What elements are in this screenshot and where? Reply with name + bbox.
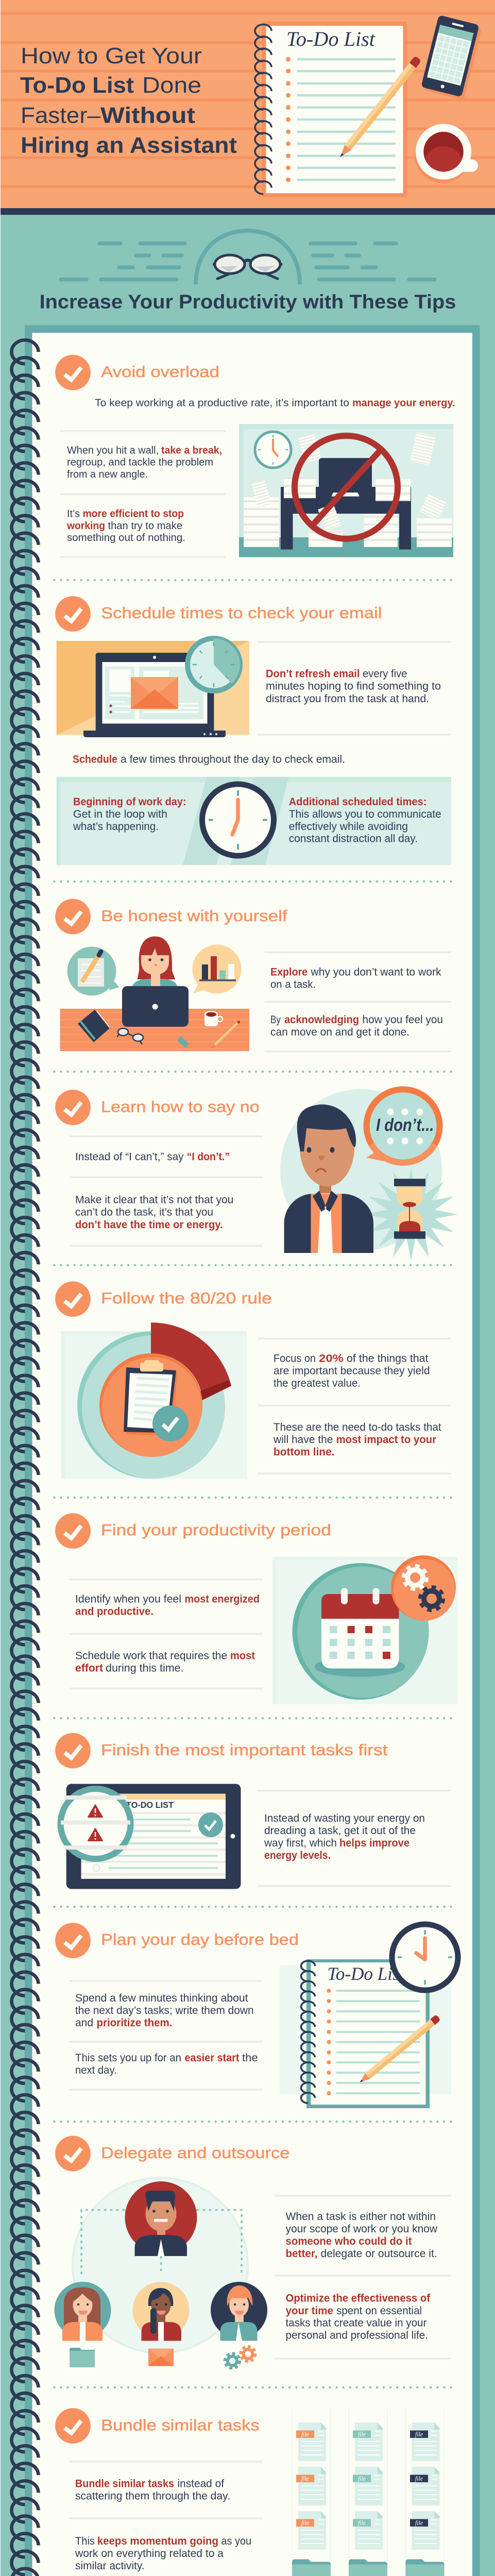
text: need to-do tasks [273,1421,441,1458]
icon: check [55,2136,91,2171]
text: acknowledging: By [270,1014,281,1026]
text: optimize: your time [285,2305,333,2317]
text: focus on 20% [274,1353,430,1389]
text: most energized: most energized [184,1594,260,1605]
heading: avoid overload: Avoid overload [101,363,219,381]
text: easier start: the [242,2052,258,2064]
icon: envelope [131,677,178,709]
text: need to-do tasks: bottom line. [274,1446,335,1458]
icon: prohibition sign [295,436,398,539]
text: easier start: easier start [184,2052,240,2064]
title: How to Get Your [21,43,202,69]
file labels: file [415,2430,423,2438]
text: don't refresh email: distract you from the task at hand. [266,693,429,705]
heading: increase your productivity: Increase Your Productivity with These Tips [40,292,456,313]
illustration: files and folders [292,2409,444,2576]
icon: check [55,899,91,934]
text: schedule: Schedule [73,754,117,766]
text: need to-do tasks: These are the need to-do tasks that [274,1421,441,1433]
icon: pencil [337,56,422,160]
illustration: tablet with magnifier: TO-DO LIST [126,1800,174,1810]
file labels: file [301,2430,309,2438]
text: beginning of work day [73,796,186,833]
icon: warning [88,1828,103,1841]
text: spend a few minutes: the next day’s tasks; write them down [75,2005,254,2016]
file labels: file [358,2519,366,2527]
text: make it clear: Make it clear that it’s not that you [75,1194,233,1206]
panel: scheduled times [57,777,451,865]
icon: check [55,1513,91,1549]
text: acknowledging: can move on and get it done. [270,1026,409,1038]
heading: schedule times: Schedule times to check your email [101,604,382,622]
text: spend a few minutes: and [75,2017,93,2029]
icon: envelope [148,2348,174,2366]
text: take a break: from a new angle. [67,469,148,480]
text: more efficient: It’s [67,508,80,519]
icon: wall clock [255,432,291,468]
text: most effort: effort [75,1663,103,1674]
section: finish the most important tasks first [55,1733,451,1889]
text: more efficient: more efficient to stop [82,508,184,519]
section: learn how to say no [55,1089,457,1261]
person: team member [211,2282,267,2341]
heading: important tasks: Finish the most important tasks first [101,1741,388,1759]
icon: check [55,1923,91,1958]
illustration: laptop, envelope and clock [57,638,249,737]
text: most effort: most [230,1650,255,1662]
illustration: woman at desk [60,937,249,1051]
icon: laptop [122,986,189,1027]
text: beginning of work day: what’s happening. [73,821,159,833]
text: schedule: a few times throughout the day to check email. [121,754,345,766]
text: bundle similar: instead of [177,2478,224,2489]
text: take a break [67,445,222,480]
icon: pencil [212,1020,241,1048]
icon: cup [204,1011,223,1026]
file labels: file [301,2475,309,2482]
text: acknowledging: acknowledging [284,1014,359,1026]
icon: calendar [321,1588,399,1668]
text: take a break: take a break, [161,445,222,456]
text: bundle similar [75,2478,230,2502]
text: instead of wasting: helps improve [339,1837,409,1849]
illustration: notebook with clock: To-Do List [328,1963,405,1984]
intro text: To keep working at a productive rate, it’s important to [95,398,349,409]
text: don't refresh email: Don’t refresh email [266,668,360,680]
pie slice: 20% [151,1323,231,1400]
text: keeps momentum: similar activity. [75,2560,145,2572]
illustration: overloaded desk [239,424,453,557]
text: spend a few minutes: prioritize them. [97,2017,172,2029]
text: focus on 20%: 20% [319,1353,344,1364]
text: when a task: someone who could do it [285,2235,412,2247]
spiral binding [12,340,38,2576]
file labels [296,2430,428,2527]
section: schedule times to check your email [55,596,451,865]
person: manager [125,2181,197,2256]
text: instead of wasting: Instead of wasting your energy on [264,1812,425,1824]
section: delegate and outsource [55,2136,451,2368]
person: team member [55,2282,111,2341]
text: optimize: tasks that create value in your [285,2317,426,2329]
icon: hourglass [394,1179,425,1239]
text: keeps momentum: work on everything related to a [75,2548,224,2560]
section: be honest with yourself [55,899,451,1052]
title: Done [142,73,201,98]
icon: clock [392,1924,458,1990]
text: when a task: When a task is either not within [285,2211,436,2223]
text: make it clear: don’t have the time or energy. [75,1219,223,1231]
text: take a break: When you hit a wall, [67,445,159,456]
speech bubble: i don't: I don’t... [376,1115,434,1135]
text: keeps momentum: This [75,2535,95,2547]
heading: plan your day: Plan your day before bed [101,1930,299,1948]
text: instead of wasting [264,1812,425,1861]
text: don't refresh email: every five [363,668,407,680]
header band [1,0,495,215]
text: most energized: and productive. [75,1606,153,1618]
illustration: man saying i don't [280,1089,457,1261]
section: bundle similar tasks [55,2408,444,2576]
title: Faster– [21,103,101,128]
text: when a task: better, [285,2248,317,2260]
icon: laptop [83,653,226,737]
folders [292,2560,444,2576]
notebook: to-do list [255,22,422,197]
text: explore: on a task. [270,979,316,990]
text: additional scheduled times: Additional scheduled times: [289,796,426,808]
text: additional scheduled times [289,796,441,845]
icon: glasses [213,255,282,279]
icon: clock [202,784,274,856]
bubble: notes [67,947,120,995]
text: explore: why you don’t want to work [310,967,441,978]
icon: check [55,1733,91,1768]
decorative glasses and dashes [61,231,435,284]
file labels: file [415,2519,423,2527]
notebook: to-do list: To-Do List [286,27,375,50]
icon: coffee cup [415,124,478,187]
intro text [95,398,455,409]
text: keeps momentum [75,2535,251,2572]
title: Without [100,103,195,128]
icon: check [55,1281,91,1317]
text: instead of i can't: “I don’t.” [187,1151,230,1163]
text: keeps momentum: as you [221,2535,251,2547]
text: instead of wasting: way first, which [264,1837,337,1849]
icon: magnifier [61,1789,131,1859]
speech bubble: i don't [366,1089,440,1163]
icon: pencil [357,2014,441,2086]
text: focus on 20%: of the things that [347,1353,429,1364]
text: focus on 20%: are important because they yield [274,1365,430,1377]
text: easier start: This sets you up for an [75,2052,181,2064]
text: need to-do tasks: will have the [273,1434,333,1446]
icon: check badge [152,1405,189,1442]
text: don't refresh email [266,668,441,705]
heading: bundle: Bundle similar tasks [101,2416,260,2434]
text: when a task: your scope of work or you know [285,2223,438,2235]
text: additional scheduled times: constant distraction all day. [289,833,418,845]
file labels: file [301,2519,309,2527]
text: bundle similar: Bundle similar tasks [75,2478,174,2489]
icon: notebook [78,1010,110,1042]
text: instead of i can't: Instead of “I can’t,” say [75,1151,184,1163]
text: more efficient: working [66,520,105,532]
section: follow the 80/20 rule [55,1281,451,1479]
text: additional scheduled times: effectively while avoiding [289,821,408,833]
text: when a task: delegate or outsource it. [320,2248,437,2260]
file labels: file [415,2475,423,2482]
section: find your productivity period [55,1513,458,1704]
icon: gears [391,1555,456,1621]
text: focus on 20%: Focus on [274,1353,316,1364]
intro text: manage your energy. [352,398,455,409]
icon: starburst [365,1168,457,1261]
icon: folder [70,2348,95,2367]
heading: be honest: Be honest with yourself [101,907,287,925]
heading: productivity period: Find your productivity period [101,1521,331,1539]
text: instead of wasting: dreading a task, get it out of the [264,1825,416,1837]
man [284,1105,373,1253]
icon: eraser [177,1036,189,1048]
bubble: bar chart [193,945,241,993]
icon: glasses [117,1028,143,1044]
text: most effort [75,1650,255,1674]
text: make it clear: can’t do the task, it’s that you [75,1207,213,1218]
icon: warning [88,1805,103,1817]
text: optimize [285,2293,431,2342]
text: optimize: spent on essential [336,2305,422,2317]
text: more efficient: something out of nothing. [67,532,185,544]
title: Hiring an Assistant [21,133,237,158]
text: spend a few minutes [75,1992,254,2029]
section: plan your day before bed [55,1923,458,2108]
text: most effort: Schedule work that requires the [75,1650,227,1662]
file labels: file [358,2430,366,2438]
illustration: calendar and gears [272,1555,458,1704]
title [20,43,237,158]
text: optimize: personal and professional life. [285,2330,428,2342]
text: beginning of work day: Beginning of work day: [73,796,186,808]
text: don't refresh email: minutes hoping to find something to [266,680,441,692]
text: beginning of work day: Get in the loop with [73,808,167,820]
text: optimize: Optimize the effectiveness of [285,2293,431,2304]
person: team member [133,2282,190,2341]
text: take a break: regroup, and tackle the problem [67,457,213,468]
text: explore [270,967,441,990]
heading: learn how to say no: Learn how to say no [101,1097,260,1116]
text: make it clear [75,1194,233,1231]
icon: check [55,1090,91,1125]
text: explore: Explore [270,967,308,978]
section: avoid overload [55,355,455,558]
icon: check badge [198,1812,223,1837]
text: additional scheduled times: This allows you to communicate [289,808,441,820]
icon: check [55,355,91,390]
text: keeps momentum: keeps momentum going [97,2535,218,2547]
icon: clipboard [124,1360,177,1435]
text: easier start [75,2052,258,2076]
heading: delegate: Delegate and outsource [101,2144,289,2162]
file labels: file [358,2475,366,2482]
icon: check [55,2408,91,2444]
title: To-Do List [20,73,134,98]
woman [132,937,177,986]
illustration: pie chart clipboard [61,1323,247,1479]
text: need to-do tasks: most impact to your [336,1434,436,1446]
text: acknowledging: how you feel you [363,1014,443,1026]
text: focus on 20%: the greatest value. [274,1378,361,1389]
illustration: tablet with magnifier [61,1784,241,1889]
text: most energized: Identify when you feel [75,1594,181,1605]
text: spend a few minutes: Spend a few minutes thinking about [75,1992,248,2004]
heading: 80/20 rule: Follow the 80/20 rule [101,1289,272,1307]
text: acknowledging [270,1014,443,1038]
illustration: notebook with clock [280,1924,458,2108]
text: most energized [75,1594,260,1618]
text: most effort: during this time. [106,1663,184,1674]
text: when a task [285,2211,438,2260]
text: bundle similar: scattering them through the day. [75,2490,230,2502]
text: more efficient [66,508,185,544]
icon: gears [225,2346,255,2368]
text: instead of wasting: energy levels. [264,1850,331,1861]
illustration: team chart [55,2178,267,2368]
icon: check [55,596,91,632]
text: more efficient: than try to make [108,520,182,532]
text: easier start: next day. [75,2064,117,2076]
icon: phone [420,15,482,100]
icon: monitor and desk [281,458,411,549]
icon: clock [187,638,240,691]
